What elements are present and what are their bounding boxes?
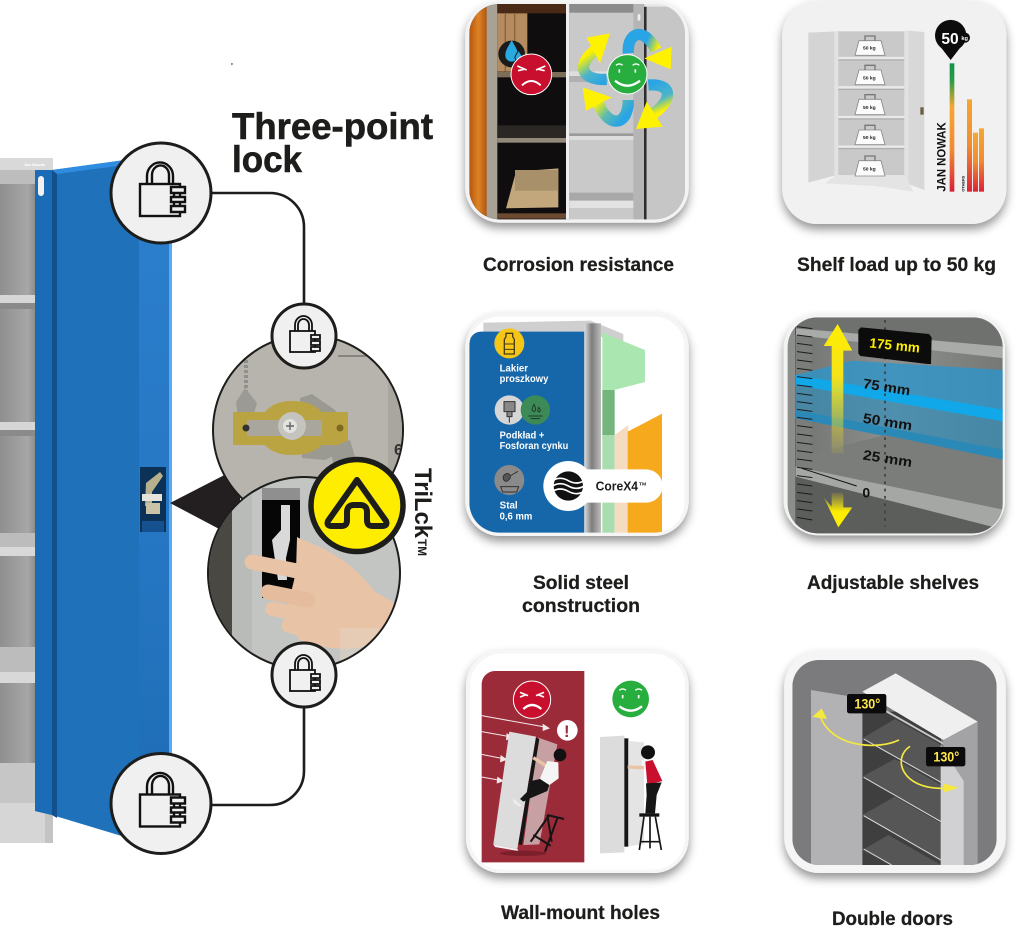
callout: right angle: 130°	[933, 750, 959, 765]
cabinet interior: Jan Nowak	[24, 162, 46, 167]
title second line: lock	[232, 139, 302, 180]
callout: left angle: 130°	[854, 697, 880, 712]
panel: solid steel construction	[465, 313, 689, 536]
panel: wall-mount holes	[466, 650, 689, 873]
steel text line 2: 0,6 mm	[500, 511, 532, 522]
red warning side	[482, 671, 584, 862]
icon: happy face	[612, 681, 649, 717]
height label 25: 25 mm	[862, 446, 913, 470]
cabinet interior shelves	[862, 712, 941, 865]
icon: warning mark	[557, 720, 578, 741]
arrow: left door swing	[812, 708, 899, 745]
detail circle: lock mechanism: 6	[394, 442, 403, 459]
icon: sad face	[511, 54, 552, 95]
powder coat text line 2: proszkowy	[500, 374, 549, 385]
cabinet with weights: 50 kg	[863, 105, 876, 111]
callout: 175 mm	[858, 327, 932, 364]
height label 75: 75 mm	[862, 375, 911, 398]
height label 0: 0	[862, 484, 870, 500]
icon: steel	[494, 465, 524, 495]
tipping cabinet with child	[493, 732, 566, 856]
door leaf	[35, 155, 172, 845]
TriLck label: TriLck	[409, 468, 436, 539]
icon: primer and zinc phosphate	[495, 395, 550, 425]
panel: adjustable shelves	[784, 314, 1005, 540]
force arrows	[482, 716, 550, 784]
label: wall-mount holes: Wall-mount holes	[501, 903, 660, 924]
arrow: up	[824, 324, 852, 453]
anchored cabinet with child	[600, 736, 662, 853]
blue height zones	[796, 361, 1005, 412]
icon: 50 kg pin	[935, 20, 970, 60]
callout: CoreX4	[543, 461, 663, 511]
cabinet with weights: 50 kg	[863, 135, 876, 141]
cabinet with weights: 50 kg	[863, 46, 876, 52]
bottom connector line	[212, 708, 304, 805]
cabinet with weights: 50 kg	[863, 166, 876, 172]
icon: small lock lower	[272, 643, 336, 707]
panel: double doors	[784, 651, 1006, 873]
icon: 50 kg pin: kg	[961, 36, 968, 42]
cabinet with weights: 50 kg	[863, 75, 876, 81]
icon: large lock top	[111, 143, 211, 243]
steel text: Stal	[500, 501, 518, 512]
cabinet interior	[0, 158, 53, 843]
trademark label: TM	[415, 539, 429, 556]
icon: powder paint	[494, 328, 524, 358]
others label: OTHERS	[961, 175, 966, 192]
label: shelf load: Shelf load up to 50 kg	[797, 255, 996, 276]
detail circle: lock mechanism	[212, 338, 404, 499]
label: adjustable shelves: Adjustable shelves	[807, 573, 979, 594]
label: corrosion resistance: Corrosion resistance	[483, 255, 674, 276]
detail circle: hand on handle	[207, 476, 401, 665]
powder coat text: Lakier	[500, 363, 528, 374]
primer text: Podkład +	[500, 430, 545, 441]
bar chart	[950, 63, 984, 192]
icon: small lock upper	[272, 304, 336, 368]
pointer triangle	[170, 467, 240, 540]
callout: right angle	[926, 747, 965, 766]
callout: CoreX4: CoreX4	[596, 479, 638, 493]
icon: recycling arrows	[583, 33, 672, 129]
icon: water drop badge	[498, 40, 525, 67]
icon: TriLock yellow badge	[311, 460, 403, 552]
icon: sad face	[513, 681, 551, 718]
primer text line 2: Fosforan cynku	[500, 441, 568, 452]
callout: left angle	[847, 694, 886, 713]
label: construction: construction	[522, 596, 640, 617]
arrow: right door swing	[901, 746, 959, 792]
cabinet with weights	[808, 31, 924, 192]
arrow: down	[824, 493, 852, 527]
callout: 175 mm: 175 mm	[869, 335, 921, 356]
panel: open blue cabinet door	[0, 155, 172, 845]
title: Three-point	[232, 106, 433, 147]
panel: corrosion resistance	[465, 1, 689, 223]
label: solid steel: Solid steel	[533, 573, 629, 594]
icon: happy face	[608, 55, 647, 94]
icon: warning mark: !	[564, 722, 570, 741]
panel: shelf load	[782, 1, 1006, 224]
icon: 50 kg pin: 50	[941, 31, 959, 48]
top connector line	[212, 193, 304, 303]
height label 50: 50 mm	[862, 410, 913, 433]
brand label: JAN NOWAK	[936, 122, 949, 192]
zero line	[802, 468, 857, 486]
callout: CoreX4: TM	[639, 481, 646, 487]
door lock window	[140, 467, 166, 532]
ruler ticks	[797, 327, 812, 520]
stray mark: '	[231, 62, 233, 71]
icon: large lock bottom	[111, 754, 211, 854]
